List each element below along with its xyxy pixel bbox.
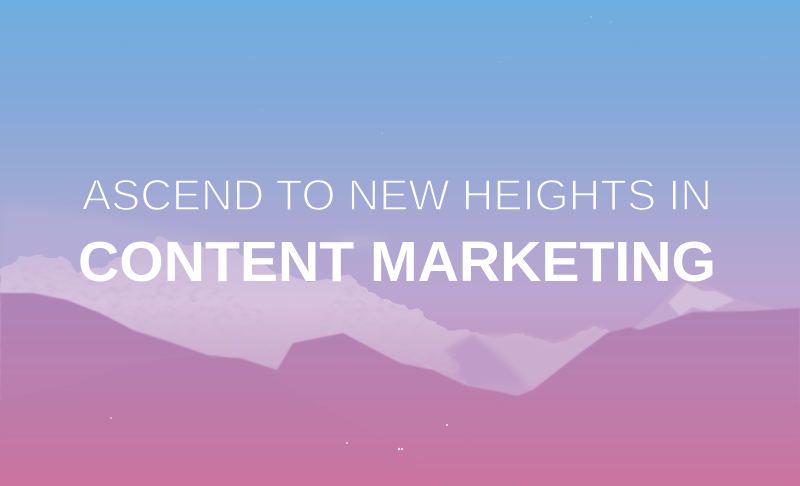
front mountain right — [440, 308, 800, 486]
title line: content marketing: CONTENT MARKETING — [78, 230, 716, 294]
front ridge lower hill — [0, 355, 470, 486]
front dark ridge left — [0, 293, 535, 486]
title line: ascend to new heights in: ASCEND TO NEW HEIGHTS IN — [82, 171, 712, 220]
haze clouds — [0, 205, 395, 290]
stars — [262, 16, 612, 134]
village lights — [110, 417, 448, 450]
snowy mountain range — [0, 238, 625, 400]
distant peak right — [625, 280, 800, 345]
